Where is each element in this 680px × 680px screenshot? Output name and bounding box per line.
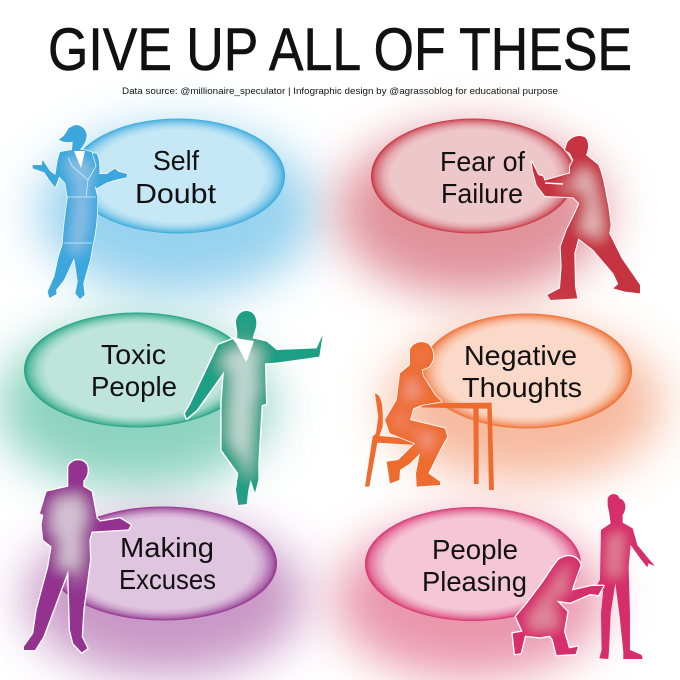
- red glow: [337, 128, 607, 296]
- label: [462, 340, 582, 403]
- orange ellipse: [422, 314, 632, 428]
- panel: fear of failure: [337, 118, 640, 300]
- panel: people pleasing: [335, 494, 655, 678]
- label: [422, 534, 527, 597]
- icon: man holding up hand: [185, 311, 323, 505]
- icon: person sitting at desk: [365, 342, 494, 490]
- panel: self doubt: [33, 118, 318, 299]
- panel: making excuses: [24, 460, 305, 676]
- label: Pleasing: [422, 566, 527, 597]
- icon: kneeling woman: [513, 556, 603, 655]
- label: People: [432, 534, 518, 565]
- label: Thoughts: [462, 372, 582, 403]
- desk: [422, 403, 494, 490]
- purple glow: [25, 520, 305, 676]
- blue glow: [38, 128, 318, 296]
- green ellipse: [24, 312, 250, 428]
- label: [91, 339, 177, 402]
- label: Doubt: [135, 178, 216, 209]
- label: [119, 532, 216, 595]
- label: [135, 145, 216, 209]
- icon: standing woman: [592, 494, 655, 659]
- label: Fear of: [440, 146, 525, 177]
- green glow: [0, 322, 273, 490]
- icon: man gesturing: [24, 460, 131, 652]
- source line: Data source: @millionaire_speculator | Infographic design by @agrassoblog for educational purpose: [122, 86, 558, 97]
- label: People: [91, 371, 177, 402]
- pink ellipse: [365, 507, 581, 621]
- label: Making: [120, 532, 214, 563]
- panel: negative thoughts: [365, 314, 663, 490]
- purple ellipse: [49, 506, 277, 620]
- label: Toxic: [101, 339, 166, 370]
- label: Self: [153, 145, 199, 176]
- label: Negative: [464, 340, 577, 371]
- label: Failure: [441, 178, 523, 209]
- icon: man pushing: [532, 136, 640, 300]
- orange glow: [387, 326, 663, 482]
- label: [440, 146, 525, 209]
- red ellipse: [371, 118, 575, 234]
- chair: [365, 393, 417, 487]
- label: Excuses: [119, 564, 216, 595]
- icon: businesswoman shrugging: [33, 125, 127, 299]
- panel: toxic people: [0, 311, 323, 505]
- pink glow: [335, 522, 605, 678]
- blue ellipse: [71, 118, 285, 234]
